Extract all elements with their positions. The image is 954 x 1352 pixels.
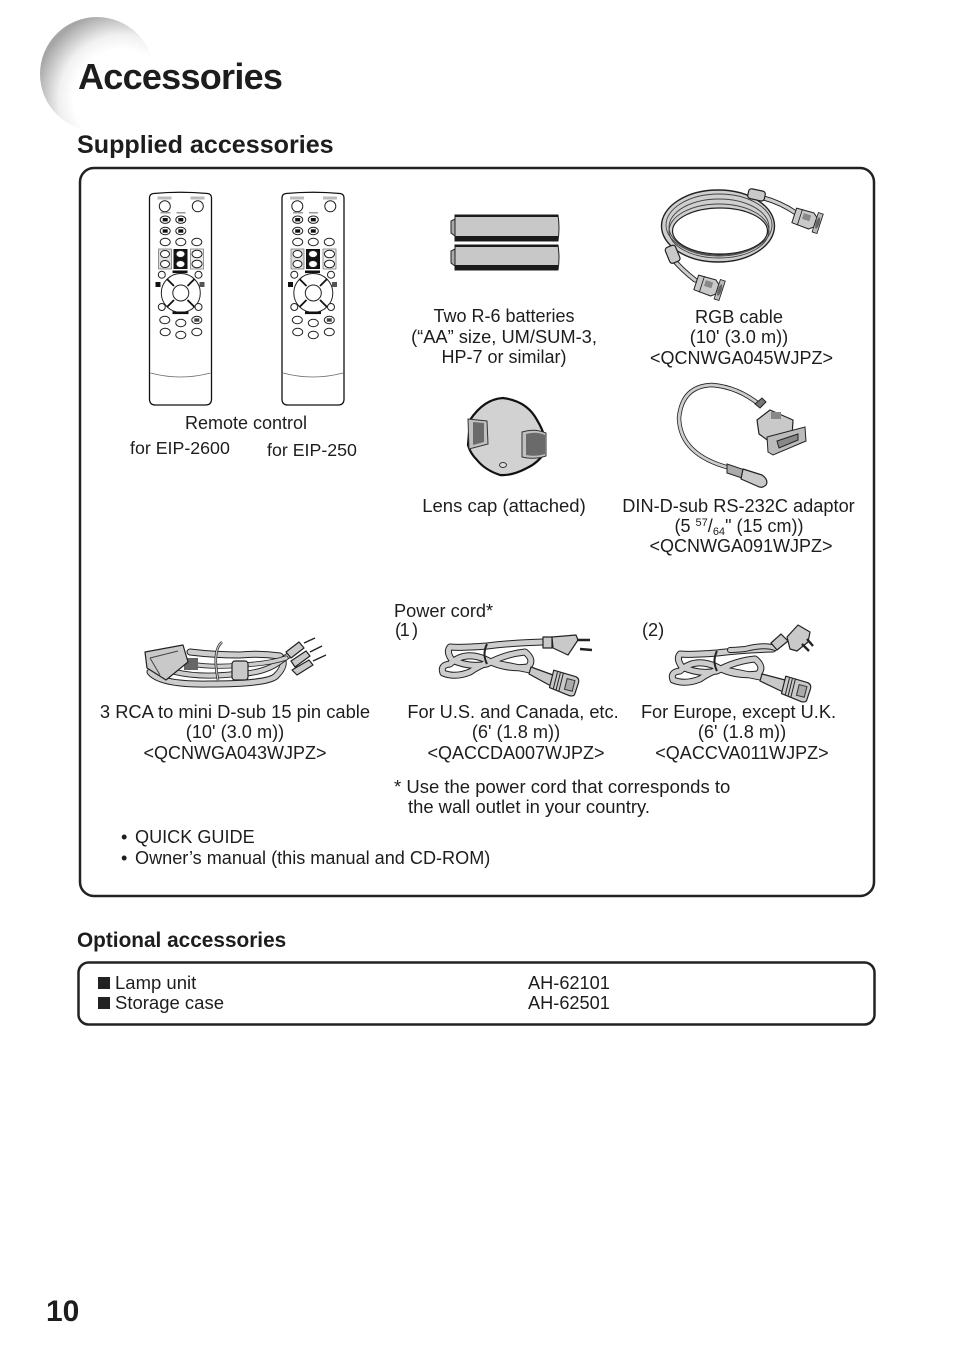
text: adaptor: (5 <box>675 516 691 536</box>
icon: DIN-D-sub adaptor <box>679 385 806 487</box>
text: lens cap: Lens cap (attached) <box>422 495 586 516</box>
icon: power cord 1 <box>442 635 592 697</box>
label: power cord <box>394 601 664 640</box>
list: printed materials: • <box>121 848 127 868</box>
text: power cord 1: (6' (1.8 m)) <box>472 722 560 742</box>
text: 3 RCA cable: <QCNWGA043WJPZ> <box>143 743 327 763</box>
text: batteries: (“AA” size, UM/SUM-3, <box>411 326 597 347</box>
icon: bullet storage case <box>98 997 110 1009</box>
text: power cord 1 <box>407 702 619 763</box>
text: RGB cable <box>650 307 833 368</box>
panel: supplied accessories <box>80 168 874 896</box>
page number: 10 <box>46 1295 79 1328</box>
label: power cord: (2) <box>642 620 664 640</box>
list: printed materials <box>121 827 490 868</box>
label: remote control: Remote control <box>185 413 307 433</box>
text: adaptor: " (15 cm)) <box>725 516 803 536</box>
heading: optional accessories: Optional accessories <box>77 929 286 952</box>
icon: batteries <box>451 215 559 270</box>
text: adaptor: 57 <box>696 517 708 529</box>
text: 3 RCA cable: (10' (3.0 m)) <box>186 722 284 742</box>
icon: power cord 2 <box>672 625 813 703</box>
text: adaptor: <QCNWGA091WJPZ> <box>649 536 833 556</box>
text: adaptor <box>622 496 855 556</box>
note: power cord: the wall outlet in your country. <box>408 796 650 817</box>
text: power cord 1: <QACCDA007WJPZ> <box>427 743 605 763</box>
text: power cord 2: <QACCVA011WJPZ> <box>655 743 829 763</box>
icon: remote control for EIP-2600 <box>150 192 212 405</box>
list: printed materials: • <box>121 827 127 847</box>
text: batteries: HP-7 or similar) <box>441 347 567 367</box>
text: power cord 2 <box>641 702 836 763</box>
text: batteries: Two R-6 batteries <box>433 306 575 326</box>
text: storage case: Storage case <box>115 992 224 1013</box>
icon: remote control for EIP-250 <box>282 192 344 405</box>
icon: lens cap <box>468 398 546 475</box>
text: 3 RCA cable: 3 RCA to mini D-sub 15 pin cable <box>100 701 370 722</box>
list: printed materials: Owner’s manual (this manual and CD-ROM) <box>135 848 490 868</box>
icon: 3 RCA cable <box>145 638 326 684</box>
note: power cord: * Use the power cord that corresponds to <box>394 776 730 797</box>
label: remote control: for EIP-2600 <box>130 438 230 458</box>
text: RGB cable: <QCNWGA045WJPZ> <box>650 348 833 368</box>
panel: optional accessories <box>78 962 874 1024</box>
text: adaptor: / <box>708 516 713 536</box>
label: power cord: Power cord* <box>394 601 493 621</box>
text: adaptor: DIN-D-sub RS-232C adaptor <box>622 496 855 516</box>
text: RGB cable: (10' (3.0 m)) <box>690 327 788 347</box>
title: Accessories <box>78 56 282 97</box>
list: printed materials: QUICK GUIDE <box>135 827 255 847</box>
decorative title swoosh <box>40 17 154 131</box>
text: power cord 2: For Europe, except U.K. <box>641 702 836 722</box>
text: RGB cable: RGB cable <box>695 307 783 327</box>
label: remote control <box>130 413 357 460</box>
text: power cord 2: (6' (1.8 m)) <box>698 722 786 742</box>
text: power cord 1: For U.S. and Canada, etc. <box>407 702 619 722</box>
label: power cord: (1 ) <box>395 620 418 640</box>
text: storage case part number: AH-62501 <box>528 993 610 1013</box>
heading: supplied accessories: Supplied accessories <box>77 131 334 159</box>
label: remote control: for EIP-250 <box>267 440 357 460</box>
text: adaptor: 64 <box>713 526 725 538</box>
note: power cord <box>394 776 730 817</box>
text: batteries <box>411 306 597 367</box>
text: lamp unit: Lamp unit <box>115 972 196 993</box>
icon: bullet lamp unit <box>98 977 110 989</box>
icon: RGB cable <box>662 188 823 300</box>
text: lamp unit part number: AH-62101 <box>528 973 610 993</box>
text: 3 RCA cable <box>100 701 370 763</box>
